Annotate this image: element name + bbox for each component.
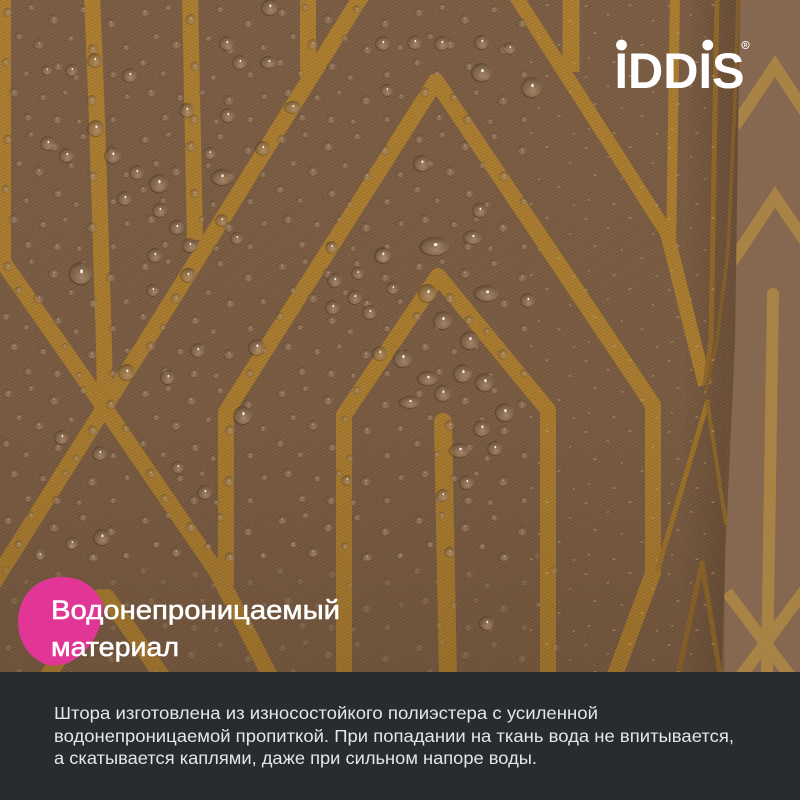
footer description text [54,703,734,768]
heading: материал [51,632,179,662]
water droplets on the fabric [0,0,560,672]
fabric twill texture and shading [0,0,740,672]
footer band [0,672,800,800]
front curtain fabric [0,0,740,672]
heading [51,595,340,662]
background curtain panel behind the front fold [700,0,800,676]
footer description text: Штора изготовлена из износостойкого полиэстера с усиленной [54,703,598,723]
gold geometric pattern on the curtain [0,0,738,680]
footer description text: водонепроницаемой пропиткой. При попадании на ткань вода не впитывается, [54,726,734,746]
logo: IDDIS with trademark: R [744,43,748,49]
footer description text: а скатывается каплями, даже при сильном напоре воды. [54,748,537,768]
logo: IDDIS with trademark: IDDIS [614,43,744,99]
heading: Водонепроницаемый [51,595,340,625]
pink blob accent [18,577,103,666]
